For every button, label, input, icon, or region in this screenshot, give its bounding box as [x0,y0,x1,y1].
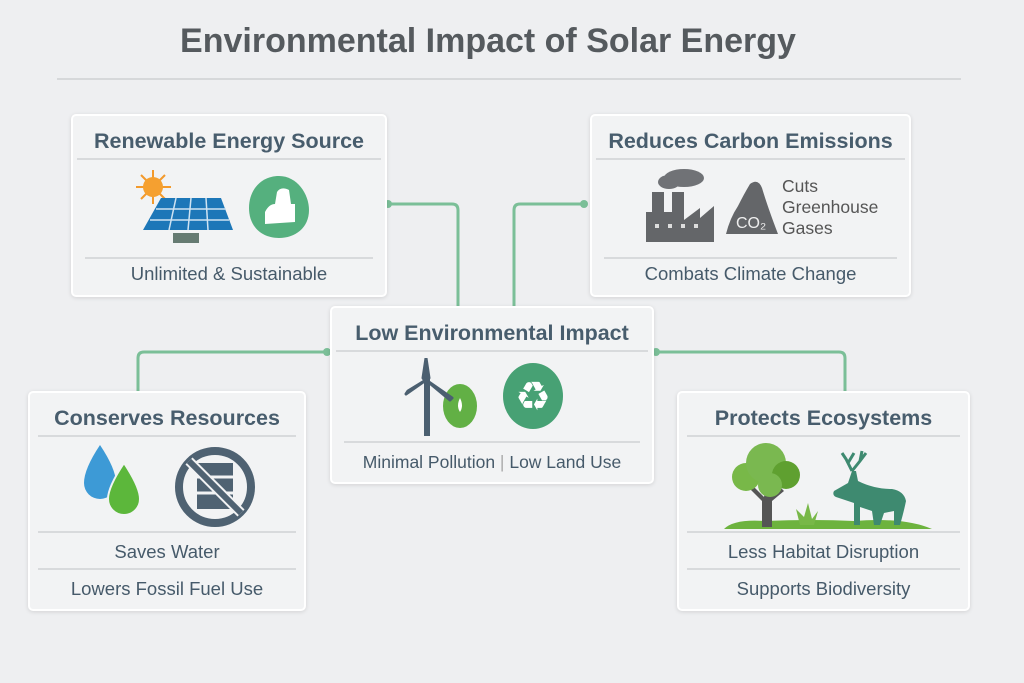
icon: recycle: ♻ [515,374,551,420]
icon: CO2 [726,182,778,234]
text: lowers fossil fuel use: Lowers Fossil Fuel Use [71,578,263,599]
text: Minimal Pollution | Low Land Use [363,452,621,472]
heading: Low Environmental Impact [355,321,629,345]
panel: conserves resources [28,391,306,611]
text: cuts greenhouse gases: Cuts [782,176,818,196]
icon: factory [646,169,714,242]
icon: wind turbine and leaf [404,358,477,436]
heading: Conserves Resources [54,406,280,430]
text: cuts greenhouse gases: Greenhouse [782,197,878,217]
text: saves water: Saves Water [114,541,220,562]
panel: reduces carbon emissions [590,114,911,297]
heading: Renewable Energy Source [94,129,364,153]
text: supports biodiversity: Supports Biodiversity [737,578,910,599]
heading: Reduces Carbon Emissions [608,129,893,153]
icon: water drops [84,445,139,514]
icon: CO2: CO₂ [736,215,766,232]
icon: tree, deer, grass [724,443,932,529]
text: cuts greenhouse gases: Gases [782,218,833,238]
title: Environmental Impact of Solar Energy [180,22,796,60]
heading: Protects Ecosystems [715,406,932,430]
text: cuts greenhouse gases [782,176,878,238]
panel: low environmental impact [330,306,654,484]
icon: sun and solar panel [136,170,233,243]
panel: protects ecosystems [677,391,970,611]
panel: renewable energy source [71,114,387,297]
text: Unlimited & Sustainable [131,263,327,284]
icon: recycle [503,363,563,429]
icon: green circle [249,176,309,238]
text: Combats Climate Change [645,263,856,284]
text: less habitat disruption: Less Habitat Disruption [728,541,919,562]
icon: no fossil fuel [175,447,255,527]
